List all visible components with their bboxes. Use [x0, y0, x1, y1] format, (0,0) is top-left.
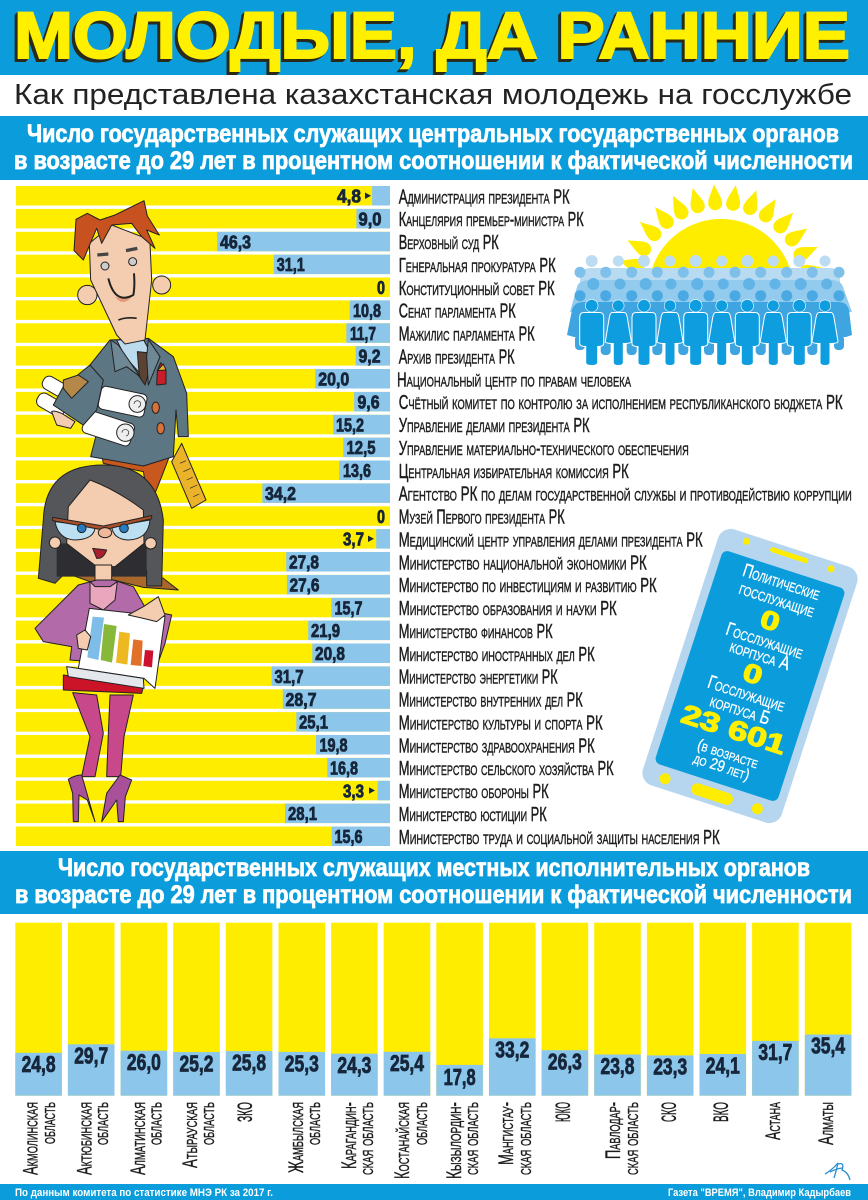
row: Министерство юстиции РК: 28,1 [288, 803, 317, 824]
row: Мажилис парламента РК: Мажилис парламента РК [399, 324, 535, 346]
row: Счётный комитет [16, 391, 843, 414]
row: Министерство обороны РК: 3,3 [343, 780, 364, 801]
column: Акмолинская область: 24,8 [22, 1051, 56, 1077]
column: Алматинская область: область [144, 1102, 167, 1145]
column: Мангистауская область: ская область [513, 1102, 536, 1175]
column: ЮКО: 26,3 [548, 1048, 582, 1074]
row: Министерство иностранных дел РК: 20,8 [315, 643, 345, 664]
column: Астана: 31,7 [758, 1039, 792, 1065]
row: Медицинский центр: Медицинский центр управления делами президента РК [399, 529, 703, 551]
column: Карагандинская область [331, 923, 378, 1175]
smartphone callout: 23 601 [678, 699, 790, 761]
column: ВКО: 24,1 [706, 1052, 740, 1078]
column: Акмолинская область: Акмолинская [20, 1102, 42, 1175]
sun [617, 184, 826, 280]
row: Министерство культуры и спорта РК: Министерство культуры и спорта РК [399, 712, 603, 734]
row: Управление делами президента РК: Управление делами президента РК [399, 415, 590, 437]
row: Музей Первого президента РК: 0 [377, 506, 385, 527]
smartphone callout [639, 526, 861, 826]
row: Администрация президента РК: 4,8 [337, 186, 361, 206]
column: Павлодарская область [594, 923, 643, 1175]
column: Павлодарская область: Павлодар- [602, 1102, 625, 1159]
row: Сенат парламента РК: Сенат парламента РК [399, 301, 516, 323]
row: Архив президента РК: 9,2 [358, 346, 380, 367]
horizontal bar chart: central bodies [16, 186, 852, 849]
row: Министерство внутренних дел РК: Министерство внутренних дел РК [399, 690, 583, 712]
column: ЮКО [542, 923, 588, 1122]
column chart: regions [15, 923, 851, 1179]
column: ВКО: ВКО [710, 1102, 733, 1122]
row: Министерство иностранных дел РК: Министерство иностранных дел РК [399, 644, 595, 666]
column: Атырауская область: область [196, 1102, 219, 1145]
column: Павлодарская область: 23,8 [600, 1053, 635, 1079]
column: Атырауская область: 25,2 [180, 1050, 214, 1076]
column: Жамбылская область: Жамбылская [285, 1102, 308, 1173]
row: Министерство образования и науки РК: Министерство образования и науки РК [399, 598, 617, 620]
title: МОЛОДЫЕ, ДА РАННИЕ [14, 0, 850, 72]
column: Мангистауская область: Мангистау- [495, 1102, 518, 1165]
row: Конституционный совет РК [16, 277, 555, 300]
row: Национальный центр по правам человека: 20,0 [318, 368, 349, 390]
row: Национальный центр по правам человека [16, 368, 631, 391]
row: Мажилис парламента РК [16, 323, 535, 346]
column: Карагандинская область: 24,3 [337, 1052, 371, 1078]
smartphone callout: 0 [756, 603, 784, 638]
row: Генеральная прокуратура РК: 31,1 [277, 254, 305, 275]
column: Карагандинская область: Карагандин- [338, 1102, 361, 1169]
row: Архив президента РК [16, 346, 515, 368]
row: Министерство здравоохранения РК [16, 734, 595, 757]
title band [0, 0, 868, 75]
row: Министерство финансов РК: 21,9 [311, 620, 340, 641]
column: Астана [752, 923, 799, 1140]
column: Кызылординская область: ская область [460, 1102, 483, 1175]
row: Музей Первого президента РК [16, 506, 565, 529]
footer band: По данным комитета по статистике МНЭ РК за 2017 г. [15, 1187, 273, 1199]
row: Агентство РК [16, 483, 852, 506]
column: Атырауская область: Атырауская [179, 1102, 202, 1168]
row: Министерство образования и науки РК: 15,7 [334, 597, 362, 618]
row: Агентство РК: 34,2 [265, 483, 296, 504]
column: Кызылординская область: Кызылордин- [443, 1102, 466, 1179]
row: Управление материально-технического обеспечения: 12,5 [346, 437, 376, 458]
row: Управление делами президента РК [16, 414, 590, 437]
row: Министерство финансов РК: Министерство финансов РК [399, 621, 553, 643]
row: Министерство обороны РК [16, 780, 549, 803]
row: Центральная избирательная комиссия РК [16, 460, 629, 483]
column: Актюбинская область: Актюбинская [74, 1102, 97, 1175]
row: Министерство труда и социальной защиты населения РК: 15,6 [334, 826, 362, 847]
illustration: sun and crowd [567, 184, 852, 366]
column: СКО: СКО [658, 1102, 681, 1122]
row: Министерство культуры и спорта РК [16, 712, 603, 734]
row: Министерство национальной экономики РК: 27,8 [289, 552, 319, 572]
column: Актюбинская область: область [90, 1102, 113, 1145]
column: Алматинская область: Алматинская [127, 1102, 150, 1175]
column: ЗКО: 25,8 [232, 1050, 266, 1076]
row: Верховный суд РК [16, 231, 499, 254]
row: Центральная избирательная комиссия РК: Центральная избирательная комиссия РК [399, 461, 629, 483]
illustration: woman with chart [35, 465, 178, 822]
row: Министерство юстиции РК [16, 803, 547, 826]
column: Алматинская область: 26,0 [127, 1049, 161, 1075]
crowd [567, 255, 852, 366]
row: Генеральная прокуратура РК [16, 254, 556, 277]
column: Атырауская область [173, 923, 220, 1168]
row: Министерство национальной экономики РК [16, 552, 647, 574]
heading band: central bodies [0, 116, 868, 180]
column: Кызылординская область [436, 923, 483, 1179]
row: Конституционный совет РК: Конституционный совет РК [399, 278, 555, 300]
column: Костанайская область: область [409, 1102, 432, 1145]
row: Управление материально-технического обеспечения: Управление материально-технического обеспечения [399, 438, 689, 460]
smartphone callout: Госслужащие [705, 672, 788, 717]
column: Жамбылская область: область [302, 1102, 325, 1145]
column: Мангистауская область [489, 923, 536, 1175]
row: Министерство иностранных дел РК [16, 643, 595, 666]
row: Счётный комитет: 9,6 [358, 391, 380, 412]
row: Министерство сельского хозяйства РК: Министерство сельского хозяйства РК [399, 758, 614, 780]
row: Центральная избирательная комиссия РК: 13,6 [343, 460, 371, 481]
smartphone callout: Госслужащие [723, 619, 806, 664]
row: Министерство обороны РК: Министерство обороны РК [399, 781, 549, 803]
row: Администрация президента РК: Администрация президента РК [399, 186, 570, 208]
column: Актюбинская область: 29,7 [74, 1042, 108, 1068]
row: Сенат парламента РК [16, 300, 516, 323]
column: Алматы [805, 923, 851, 1145]
column: Акмолинская область: область [37, 1102, 60, 1144]
column: Костанайская область: 25,4 [390, 1050, 424, 1076]
row: Министерство по инвестициям и развитию РК: Министерство по инвестициям и развитию РК [399, 575, 657, 597]
column: ЗКО: ЗКО [234, 1102, 257, 1122]
row: Министерство труда и социальной защиты населения РК [16, 826, 720, 849]
column: Жамбылская область [278, 923, 325, 1173]
row: Управление материально-технического обеспечения [16, 437, 689, 460]
row: Верховный суд РК: Верховный суд РК [399, 232, 499, 254]
smartphone callout: госслужащие [736, 578, 817, 622]
row: Медицинский центр: 3,7 [343, 529, 364, 550]
column: ВКО [700, 923, 746, 1122]
row: Министерство энергетики РК: Министерство энергетики РК [399, 667, 558, 689]
column: Мангистауская область: 33,2 [495, 1036, 529, 1062]
column: Костанайская область: Костанайская [391, 1102, 414, 1179]
column: Алматинская область [121, 923, 167, 1175]
row: Министерство сельского хозяйства РК: 16,8 [330, 757, 358, 778]
row: Министерство внутренних дел РК: 28,7 [286, 689, 316, 710]
row: Министерство национальной экономики РК: Министерство национальной экономики РК [399, 552, 647, 574]
heading band: local bodies [0, 851, 868, 914]
column: Жамбылская область: 25,3 [285, 1050, 319, 1076]
column: Кызылординская область: 17,8 [444, 1064, 476, 1090]
footer band [0, 1184, 868, 1200]
row: Сенат парламента РК: 10,8 [353, 300, 381, 321]
column: Алматы: Алматы [815, 1102, 838, 1145]
column: СКО [647, 923, 694, 1122]
row: Министерство здравоохранения РК: 19,8 [320, 734, 348, 756]
row: Министерство образования и науки РК [16, 597, 617, 620]
column: Карагандинская область: ская область [355, 1102, 378, 1175]
row: Музей Первого президента РК: Музей Первого президента РК [399, 507, 565, 529]
row: Канцелярия премьер-министра РК: 9,0 [358, 208, 382, 229]
row: Медицинский центр [16, 529, 703, 551]
row: Министерство сельского хозяйства РК [16, 757, 614, 780]
column: СКО: 23,3 [653, 1054, 687, 1080]
row: Министерство здравоохранения РК: Министерство здравоохранения РК [399, 735, 595, 757]
smartphone callout: (в возрасте [695, 737, 760, 772]
smartphone callout: 0 [739, 657, 766, 691]
artist signature [825, 1163, 850, 1180]
row: Министерство внутренних дел РК [16, 689, 583, 712]
column: Павлодарская область: ская область [620, 1102, 643, 1175]
row: Администрация президента РК [16, 186, 570, 208]
row: Канцелярия премьер-министра РК [16, 208, 584, 231]
column: ЮКО: ЮКО [552, 1102, 575, 1122]
smartphone callout: Политические [740, 560, 823, 605]
column: Костанайская область [384, 923, 432, 1179]
row: Архив президента РК: Архив президента РК [399, 346, 515, 368]
row: Министерство энергетики РК [16, 666, 558, 689]
column: Актюбинская область [68, 923, 114, 1175]
row: Верховный суд РК: 46,3 [220, 231, 251, 252]
row: Министерство юстиции РК: Министерство юстиции РК [399, 804, 547, 826]
subtitle: Как представлена казахстанская молодежь на госслужбе [14, 79, 852, 111]
row: Генеральная прокуратура РК: Генеральная прокуратура РК [399, 255, 556, 277]
row: Министерство по инвестициям и развитию РК: 27,6 [290, 574, 320, 595]
column: Алматы: 35,4 [811, 1032, 845, 1058]
row: Национальный центр по правам человека: Национальный центр по правам человека [397, 369, 631, 391]
row: Министерство финансов РК [16, 620, 553, 643]
smartphone callout: корпуса А [727, 636, 793, 675]
column: Акмолинская область [15, 923, 62, 1175]
row: Министерство по инвестициям и развитию РК [16, 574, 657, 597]
column: Астана: Астана [762, 1102, 785, 1140]
row: Канцелярия премьер-министра РК: Канцелярия премьер-министра РК [399, 209, 584, 231]
row: Конституционный совет РК: 0 [377, 277, 385, 298]
smartphone callout: корпуса Б [707, 691, 773, 730]
row: Министерство энергетики РК: 31,7 [274, 666, 304, 687]
smartphone callout: до 29 лет) [691, 750, 752, 784]
row: Министерство культуры и спорта РК: 25,1 [299, 712, 328, 733]
row: Управление делами президента РК: 15,2 [336, 414, 364, 435]
illustration: man with scrolls [34, 201, 206, 508]
column: ЗКО [226, 923, 272, 1122]
row: Мажилис парламента РК: 11,7 [350, 323, 376, 344]
